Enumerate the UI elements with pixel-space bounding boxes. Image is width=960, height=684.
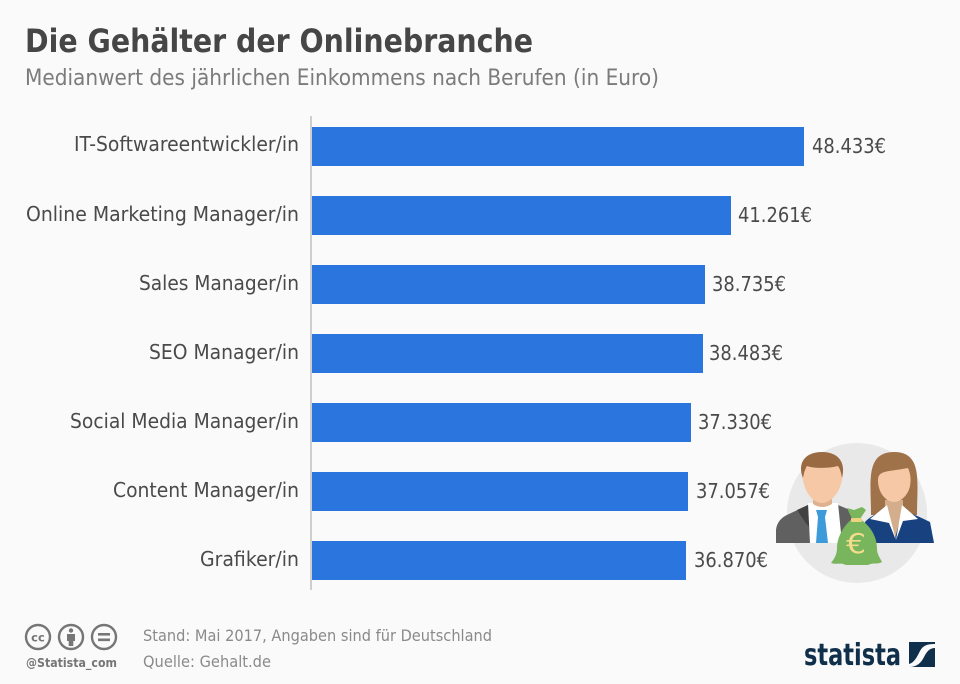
bar: Content Manager/in	[113, 472, 770, 511]
bar: Grafiker/in	[200, 541, 768, 580]
bar: IT-Softwareentwickler/in: IT-Softwareentwickler/in	[74, 132, 299, 156]
bar: SEO Manager/in: SEO Manager/in	[149, 340, 299, 364]
bar: Social Media Manager/in: Social Media Manager/in	[70, 409, 299, 433]
source note: Stand: Mai 2017, Angaben sind für Deutschland	[143, 626, 492, 645]
bar: Sales Manager/in	[139, 265, 786, 304]
bar: SEO Manager/in	[149, 334, 783, 373]
statista logo: statista	[804, 638, 901, 673]
bar: Online Marketing Manager/in: 41.261€	[738, 203, 812, 227]
icon: money bag: €	[846, 527, 866, 560]
icon: no derivatives	[92, 625, 116, 649]
icon: money bag	[831, 507, 882, 565]
bar: Online Marketing Manager/in: Online Marketing Manager/in	[26, 202, 299, 226]
bar: Social Media Manager/in	[70, 403, 772, 442]
bar chart	[26, 116, 886, 590]
icon: woman	[861, 452, 934, 543]
icon: attribution	[59, 625, 83, 649]
bar: Grafiker/in: Grafiker/in	[200, 547, 299, 571]
bar: IT-Softwareentwickler/in: 48.433€	[812, 134, 886, 158]
bar: Sales Manager/in: Sales Manager/in	[139, 271, 299, 295]
title: Die Gehälter der Onlinebranche	[25, 22, 533, 60]
bar: Content Manager/in: 37.057€	[696, 479, 770, 503]
icon: cc: cc	[31, 630, 45, 644]
bar: Online Marketing Manager/in	[26, 196, 812, 235]
source note	[143, 626, 492, 671]
icons: creative commons licence	[26, 625, 116, 649]
illustration: man, woman and money bag	[776, 443, 934, 583]
icon: man	[776, 452, 858, 543]
subtitle: Medianwert des jährlichen Einkommens nach Berufen (in Euro)	[25, 66, 659, 91]
statista handle: @Statista_com	[26, 656, 117, 671]
bar: SEO Manager/in: 38.483€	[709, 341, 783, 365]
bar: Content Manager/in: Content Manager/in	[113, 478, 299, 502]
bar: IT-Softwareentwickler/in	[74, 127, 886, 166]
bar: Grafiker/in: 36.870€	[694, 548, 768, 572]
source note: Quelle: Gehalt.de	[143, 652, 271, 671]
bar: Social Media Manager/in: 37.330€	[698, 410, 772, 434]
bar: Sales Manager/in: 38.735€	[712, 272, 786, 296]
icon: statista mark	[909, 642, 935, 667]
